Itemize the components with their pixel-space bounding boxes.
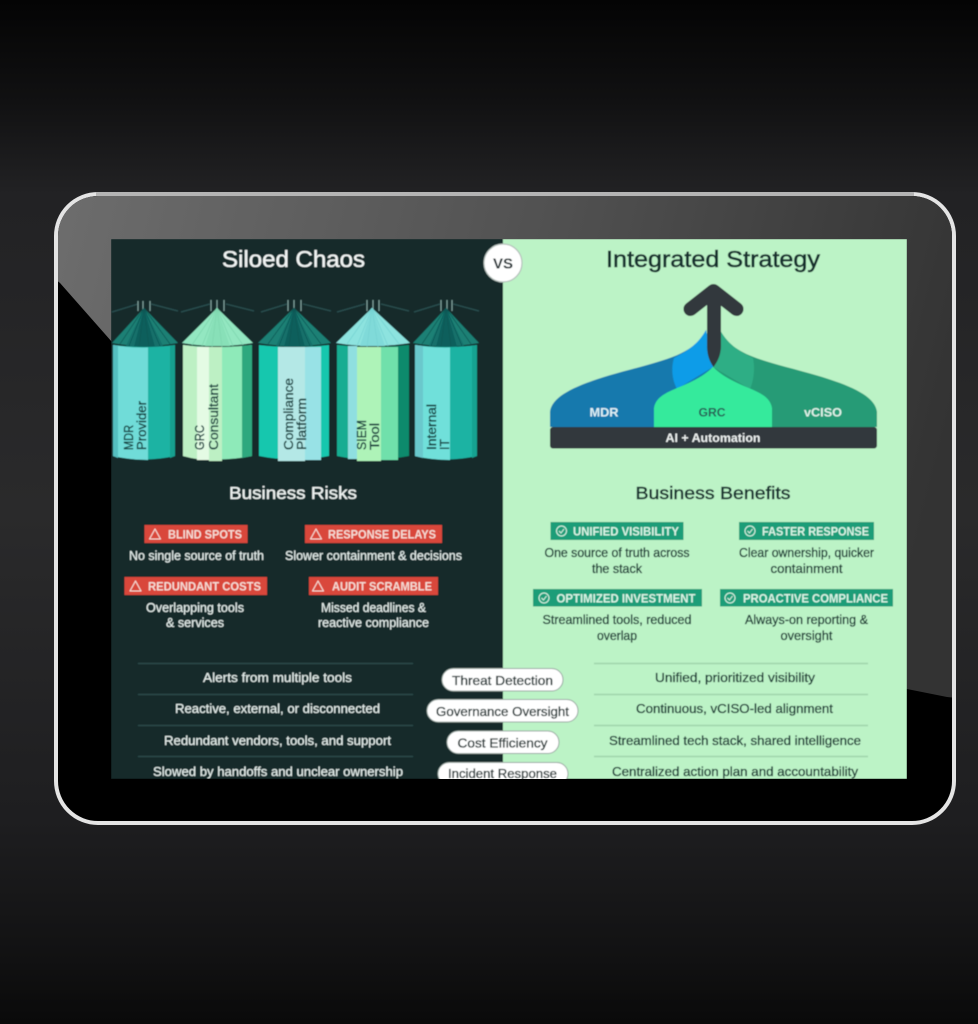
- diagram: converging services: GRC: [698, 406, 726, 420]
- comparison rows: siloed: Slowed by handoffs and unclear ownership: [153, 765, 403, 779]
- pill: Governance Oversight: [427, 700, 578, 722]
- heading: Business Risks: Business Risks: [229, 483, 357, 503]
- benefit: Proactive Compliance: PROACTIVE COMPLIANCE: [743, 594, 888, 606]
- comparison rows: siloed: [138, 664, 413, 779]
- risk: Blind Spots: BLIND SPOTS: [168, 530, 242, 542]
- silo: GRC Consultant: [181, 300, 254, 461]
- vCISO segment: [713, 348, 878, 428]
- panel: siloed chaos: [111, 239, 503, 779]
- risk: Blind Spots: [129, 525, 264, 563]
- comparison rows: integrated: Unified, prioritized visibility: [655, 671, 816, 685]
- risk: Redundant Costs: REDUNDANT COSTS: [148, 582, 261, 594]
- benefit: Optimized Investment: OPTIMIZED INVESTMENT: [556, 594, 696, 606]
- comparison rows: integrated: Continuous, vCISO-led alignment: [636, 702, 834, 716]
- risk: Redundant Costs: [124, 577, 267, 630]
- diagram: converging services: AI + Automation: [666, 431, 760, 445]
- risk: Audit Scramble: [309, 577, 438, 630]
- silo: SIEM Tool: [336, 300, 410, 461]
- benefit: Optimized Investment: [533, 589, 702, 643]
- pill: Incident Response: [436, 761, 569, 779]
- badge: VS: VS: [493, 256, 513, 272]
- silo: SIEM Tool: SIEM: [354, 420, 369, 450]
- comparison rows: siloed: Reactive, external, or disconnected: [175, 702, 380, 716]
- silo: Internal IT: IT: [437, 439, 452, 450]
- heading: Siloed Chaos: Siloed Chaos: [222, 246, 365, 272]
- diagram: converging services: MDR: [590, 406, 619, 420]
- risk: Response Delays: RESPONSE DELAYS: [328, 530, 436, 542]
- silo: MDR Provider: Provider: [134, 400, 149, 450]
- comparison rows: integrated: Centralized action plan and accountability: [612, 765, 859, 779]
- screen: [111, 239, 907, 785]
- green overlap: [713, 330, 754, 389]
- silo: Internal IT: [413, 300, 479, 460]
- benefit: Faster Response: FASTER RESPONSE: [762, 526, 869, 538]
- risk: Response Delays: [285, 525, 462, 563]
- benefit: Faster Response: containment: [770, 562, 843, 576]
- pill: Cost Efficiency: [447, 731, 559, 754]
- GRC segment: [654, 367, 772, 427]
- benefit: Faster Response: [739, 522, 874, 576]
- risk: Audit Scramble: Missed deadlines &: [321, 601, 427, 615]
- pill: Threat Detection: [442, 668, 563, 691]
- silo: Compliance Platform: Compliance: [281, 378, 296, 450]
- benefit: Faster Response: Clear ownership, quicker: [739, 546, 874, 560]
- diagram: converging services: [550, 291, 877, 448]
- benefit: Optimized Investment: Streamlined tools, reduced: [542, 613, 692, 627]
- blue overlap: [672, 330, 713, 389]
- heading: Integrated Strategy: Integrated Strategy: [606, 246, 821, 272]
- silo: MDR Provider: [112, 301, 178, 460]
- silo: SIEM Tool: Tool: [367, 423, 382, 450]
- risk: Blind Spots: No single source of truth: [129, 549, 264, 563]
- comparison rows: integrated: [594, 664, 868, 779]
- pill: Threat Detection: Threat Detection: [452, 674, 553, 688]
- panel: integrated strategy: [503, 239, 907, 779]
- benefit: Proactive Compliance: oversight: [780, 629, 833, 643]
- benefit: Unified Visibility: the stack: [592, 562, 643, 576]
- silo: GRC Consultant: GRC: [192, 425, 207, 450]
- arrow: [690, 291, 736, 367]
- silo: Internal IT: Internal: [424, 404, 439, 450]
- tablet frame: [54, 192, 956, 823]
- risk: Redundant Costs: Overlapping tools: [146, 601, 244, 615]
- risk: Audit Scramble: reactive compliance: [318, 616, 429, 630]
- risk: Audit Scramble: AUDIT SCRAMBLE: [332, 582, 432, 594]
- comparison rows: siloed: Alerts from multiple tools: [203, 671, 352, 685]
- benefit: Unified Visibility: [544, 522, 690, 576]
- comparison rows: siloed: Redundant vendors, tools, and support: [164, 734, 392, 748]
- pill: Cost Efficiency: Cost Efficiency: [458, 736, 548, 750]
- benefit: Proactive Compliance: [720, 589, 893, 643]
- AI + Automation bar: [550, 427, 877, 448]
- MDR segment: [550, 330, 713, 427]
- silo: GRC Consultant: Consultant: [206, 384, 221, 450]
- benefit: Unified Visibility: UNIFIED VISIBILITY: [573, 526, 679, 538]
- benefit: Optimized Investment: overlap: [597, 629, 637, 643]
- risk: Response Delays: Slower containment & decisions: [285, 549, 462, 563]
- diagram: converging services: vCISO: [804, 406, 842, 420]
- risk: Redundant Costs: & services: [166, 616, 224, 630]
- pill: Incident Response: Incident Response: [448, 767, 557, 781]
- comparison rows: integrated: Streamlined tech stack, shared intelligence: [609, 734, 861, 748]
- silo: Compliance Platform: [258, 300, 331, 461]
- benefit: Proactive Compliance: Always-on reporting &: [745, 613, 869, 627]
- pill: Governance Oversight: Governance Oversight: [436, 705, 570, 719]
- heading: Business Benefits: Business Benefits: [636, 483, 791, 503]
- silo: Compliance Platform: Platform: [294, 398, 309, 450]
- benefit: Unified Visibility: One source of truth across: [544, 546, 690, 560]
- silo: MDR Provider: MDR: [121, 425, 136, 450]
- badge: VS: [484, 244, 522, 282]
